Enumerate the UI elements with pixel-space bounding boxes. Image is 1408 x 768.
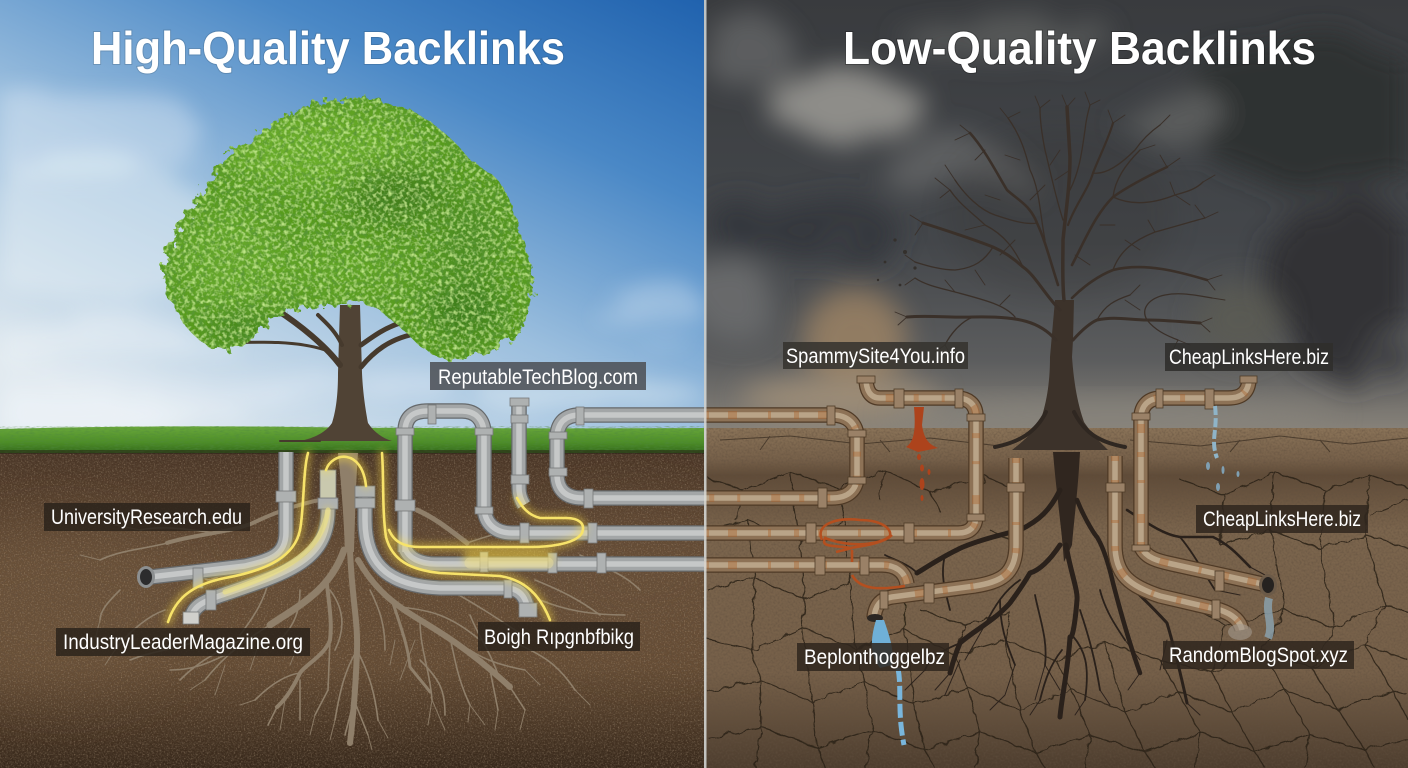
grass — [0, 426, 704, 454]
label: SpammySite4You.info: SpammySite4You.info — [786, 345, 965, 368]
rusty couplings — [806, 376, 1257, 619]
glowing yellow link lines — [168, 453, 583, 622]
branches — [895, 92, 1225, 357]
rusty pipes — [704, 378, 1267, 630]
pipe couplings and open ends — [183, 398, 606, 624]
trunk — [1012, 300, 1108, 450]
trunk base roots — [995, 412, 1125, 447]
label: CheapLinksHere.biz lower: CheapLinksHere.biz — [1203, 508, 1361, 531]
dead roots — [885, 452, 1265, 717]
roots: healthy tree — [80, 453, 640, 750]
divider — [704, 0, 706, 768]
panel: high-quality side — [0, 0, 750, 768]
healthy tree — [163, 98, 533, 441]
title: low-quality: Low-Quality Backlinks — [843, 22, 1316, 74]
title: high-quality: High-Quality Backlinks — [91, 22, 565, 74]
silver pipes — [150, 398, 704, 622]
cracked ground — [704, 428, 1408, 768]
tree crown haze — [989, 162, 1020, 182]
label: IndustryLeaderMagazine.org: IndustryLeaderMagazine.org — [63, 631, 303, 654]
label: UniversityResearch.edu: UniversityResearch.edu — [51, 506, 242, 529]
label: ReputableTechBlog.com: ReputableTechBlog.com — [438, 366, 638, 389]
label: garbled site name: Beplonthoggelbz — [804, 646, 945, 669]
rust leak drip — [906, 407, 938, 501]
dead tree — [895, 92, 1225, 450]
water leaks — [872, 406, 1270, 745]
sky with clouds — [0, 0, 720, 440]
rust wires around pipes — [821, 519, 905, 588]
canopy — [163, 98, 533, 358]
panel: low-quality side — [680, 0, 1408, 768]
open pipe end — [137, 566, 155, 588]
storm sky — [680, 0, 1408, 440]
label: garbled blog name: Boigh Rıpgnbfbikg — [484, 626, 634, 649]
ground cracks — [708, 470, 1408, 768]
debris near tree — [877, 238, 917, 286]
pipe open ends — [867, 574, 1277, 622]
soil — [0, 450, 750, 768]
trunk and branches — [246, 305, 411, 442]
label: CheapLinksHere.biz top: CheapLinksHere.biz — [1169, 346, 1329, 369]
label: RandomBlogSpot.xyz: RandomBlogSpot.xyz — [1169, 644, 1348, 667]
